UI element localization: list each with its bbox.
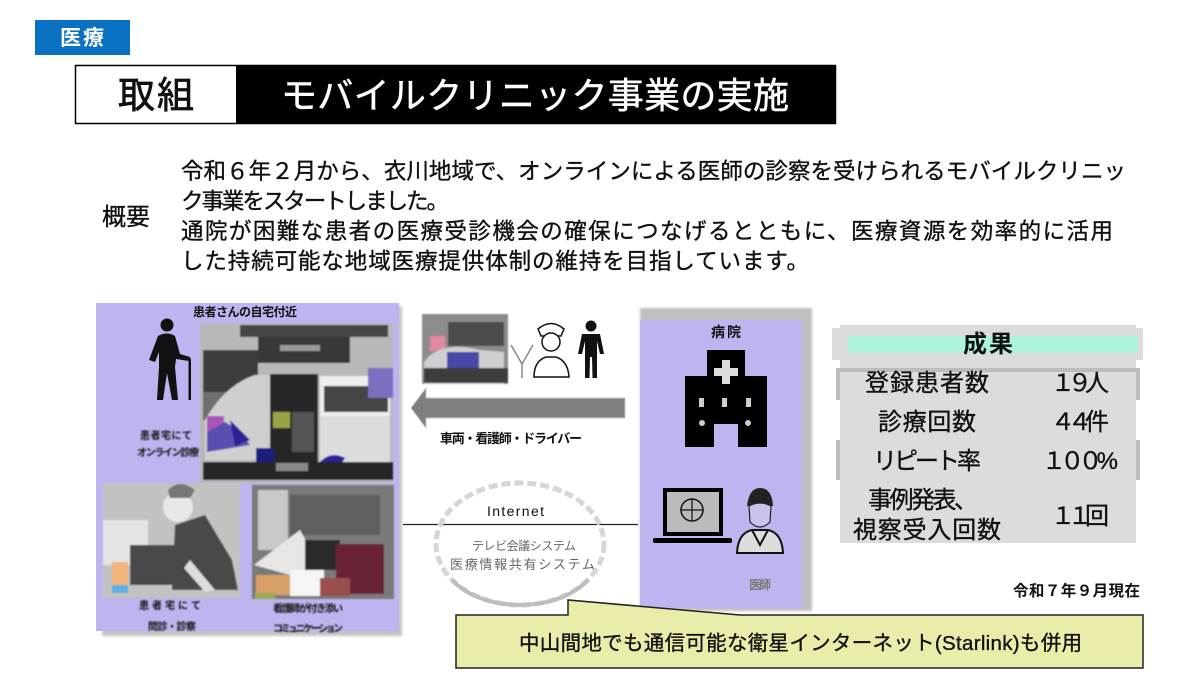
panel caption: 患者さんの自宅付近 [193, 304, 297, 319]
photo: mobile clinic van [200, 323, 393, 483]
row: case presentations and visits: １１回 [1051, 503, 1109, 530]
row: registered patients [836, 368, 1140, 400]
label: at-home online consultation [137, 429, 199, 459]
category tag: 医療 [35, 20, 130, 55]
overview text block: 通院が困難な患者の医療受診機会の確保につなげるとともに、医療資源を効率的に活用 [181, 219, 1113, 244]
arrow: dispatch to patient [411, 388, 625, 428]
panel: patient side [96, 303, 402, 636]
label: doctor consultation [139, 599, 201, 633]
cloud label: Internet [487, 503, 544, 519]
results heading: 成果 [963, 331, 1013, 358]
panel: hospital [640, 308, 812, 611]
photo: patient with nurse [103, 483, 240, 598]
row: consultations: ４４件 [1051, 409, 1109, 436]
overview text block: した持続可能な地域医療提供体制の維持を目指しています。 [181, 249, 809, 274]
category tag: 医療: 医療 [60, 27, 104, 50]
photo: van interior consultation [252, 485, 394, 599]
callout: satellite internet: 中山間地でも通信可能な衛星インターネット(Starlink)も併用 [519, 632, 1082, 655]
overview text block [181, 159, 1126, 274]
row: repeat rate [836, 440, 1140, 480]
cloud: internet system: テレビ会議システム [472, 539, 576, 553]
label: at-home online consultation: オンライン診療 [137, 446, 199, 459]
icon: doctor [737, 488, 783, 553]
overview text block: ク事業をスタートしました。 [181, 189, 449, 214]
as-of date note: 令和７年９月現在 [1013, 581, 1140, 600]
row: case presentations and visits [853, 487, 1109, 544]
label: communication in van: 看護師が付き添い [273, 602, 343, 615]
row: case presentations and visits: 視察受入回数 [853, 517, 1001, 544]
label: at-home online consultation: 患者宅にて [140, 429, 192, 442]
label: communication in van [273, 602, 343, 635]
icon: driver [578, 320, 604, 378]
overview label: 概要 [102, 204, 150, 231]
row: consultations [878, 409, 1109, 436]
cloud: internet system [436, 483, 604, 605]
callout: satellite internet [456, 600, 1143, 668]
row: repeat rate: リピート率 [873, 448, 981, 475]
title banner [76, 65, 836, 124]
label: doctor consultation: 問診・診察 [148, 620, 196, 633]
hospital label: 病院 [711, 324, 741, 340]
label: communication in van: コミュニケーション [273, 623, 343, 635]
row: registered patients: 登録患者数 [865, 370, 989, 397]
doctor label: 医師 [749, 577, 771, 592]
icon: elderly person with cane [149, 318, 191, 400]
label: doctor consultation: 患者宅にて [139, 599, 201, 612]
cloud: internet system: 医療情報共有システム [450, 557, 595, 572]
icon: hospital building [685, 350, 767, 447]
row: repeat rate: １００% [1042, 448, 1118, 475]
row: consultations: 診療回数 [878, 409, 976, 436]
row: case presentations and visits: 事例発表、 [868, 487, 978, 514]
icon: laptop [653, 490, 732, 543]
icon: nurse with stethoscope [511, 324, 569, 378]
overview text block: 令和６年２月から、衣川地域で、オンラインによる医師の診察を受けられるモバイルクリニッ [181, 159, 1126, 184]
title banner: モバイルクリニック事業の実施 [281, 75, 789, 116]
photo: van exterior [422, 314, 508, 384]
connection line [403, 524, 638, 526]
arrow label: 車両・看護師・ドライバー [440, 431, 582, 446]
title banner: 取組 [118, 75, 194, 116]
panel: results table [832, 325, 1143, 544]
row: registered patients: １９人 [1051, 370, 1109, 397]
